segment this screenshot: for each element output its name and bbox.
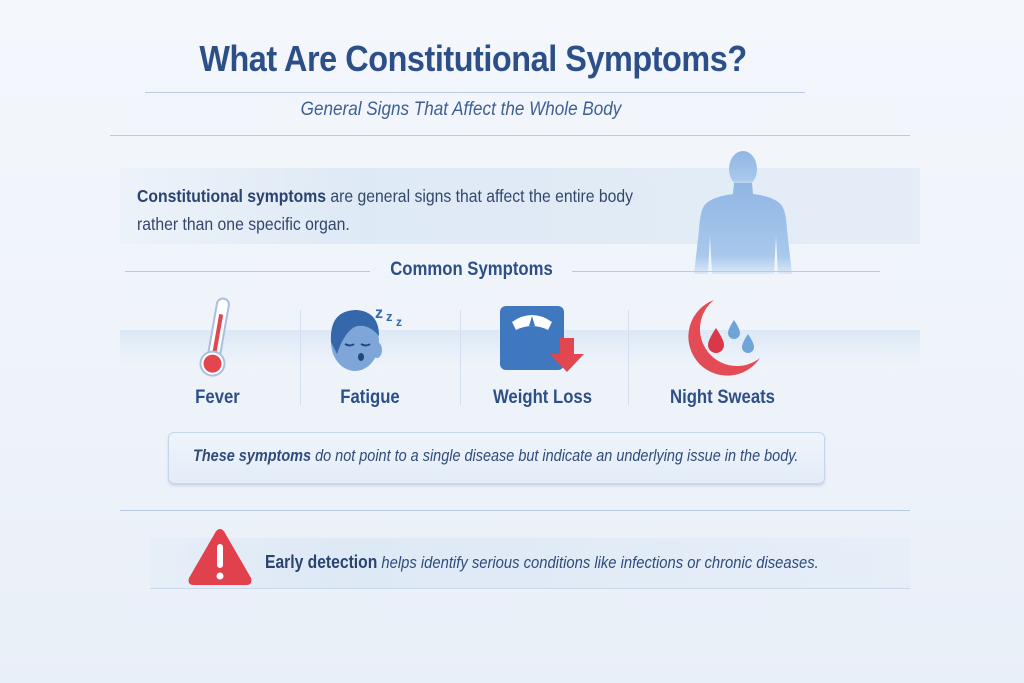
subtitle: General Signs That Affect the Whole Body [301, 99, 621, 120]
icon: scale with arrow [500, 306, 584, 372]
symptom: night sweats [670, 300, 775, 408]
icon: sleepy face [330, 305, 402, 371]
label: fever: Fever [195, 387, 240, 408]
icon: sleepy face: z [375, 305, 383, 322]
symptom: fatigue [330, 305, 402, 408]
warning text: Early detection helps identify serious conditions like infections or chronic diseases. [265, 552, 819, 572]
label: night sweats: Night Sweats [670, 387, 775, 408]
icon: sleepy face: z [386, 309, 393, 324]
intro text: rather than one specific organ. [137, 214, 350, 234]
label: weight loss: Weight Loss [493, 387, 592, 408]
title: What Are Constitutional Symptoms? [199, 38, 747, 79]
icon: warning triangle [188, 529, 252, 585]
intro text: Constitutional symptoms are general signs that affect the entire body [137, 186, 633, 206]
intro text [137, 186, 633, 234]
icon: thermometer [200, 298, 230, 377]
section heading: common symptoms: Common Symptoms [390, 259, 553, 280]
symptom: weight loss [493, 306, 592, 408]
icon: sleepy face: z [396, 315, 402, 329]
symptom: fever [195, 298, 240, 408]
icons band [120, 330, 920, 365]
intro band [120, 168, 920, 244]
callout text: These symptoms do not point to a single disease but indicate an underlying issue in the body. [193, 446, 798, 465]
label: fatigue: Fatigue [340, 387, 400, 408]
callout box [168, 432, 825, 484]
warning band [150, 538, 910, 589]
icon: human silhouette [694, 151, 792, 274]
icon: moon with drops [688, 300, 760, 376]
